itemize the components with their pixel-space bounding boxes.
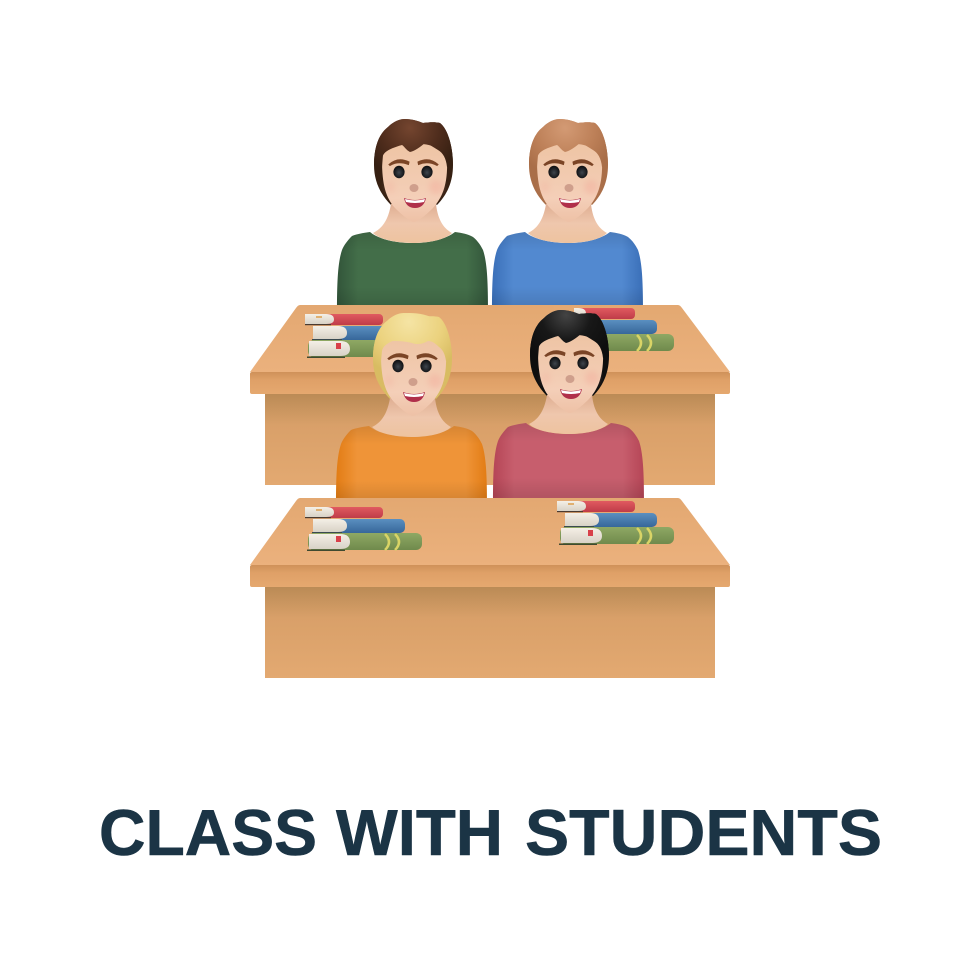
books: back desk right — [557, 308, 674, 352]
face — [528, 144, 607, 243]
red shirt — [493, 423, 644, 503]
books: back desk left — [305, 314, 422, 358]
black fringe — [530, 310, 609, 358]
title — [99, 796, 882, 869]
back desk — [250, 305, 730, 485]
face — [373, 144, 452, 243]
auburn fringe — [529, 119, 608, 167]
face — [372, 338, 451, 437]
student: back right, blue shirt — [492, 119, 643, 312]
title: STUDENTS — [525, 796, 882, 869]
blond fringe — [373, 313, 452, 361]
student: front left, orange shirt — [336, 313, 487, 506]
back hair — [530, 310, 609, 396]
title: WITH — [336, 796, 503, 869]
face — [529, 334, 608, 434]
title: CLASS — [99, 796, 317, 869]
green shirt — [337, 232, 488, 312]
student: back left, green shirt — [337, 119, 488, 312]
brown fringe — [374, 119, 453, 167]
books: front desk right — [557, 501, 674, 545]
back hair — [529, 119, 608, 205]
books: front desk left — [305, 507, 422, 551]
blue shirt — [492, 232, 643, 312]
back hair — [374, 119, 453, 205]
student: front right, red shirt — [493, 310, 644, 503]
orange shirt — [336, 426, 487, 506]
front desk — [250, 498, 730, 678]
back hair — [373, 313, 452, 399]
